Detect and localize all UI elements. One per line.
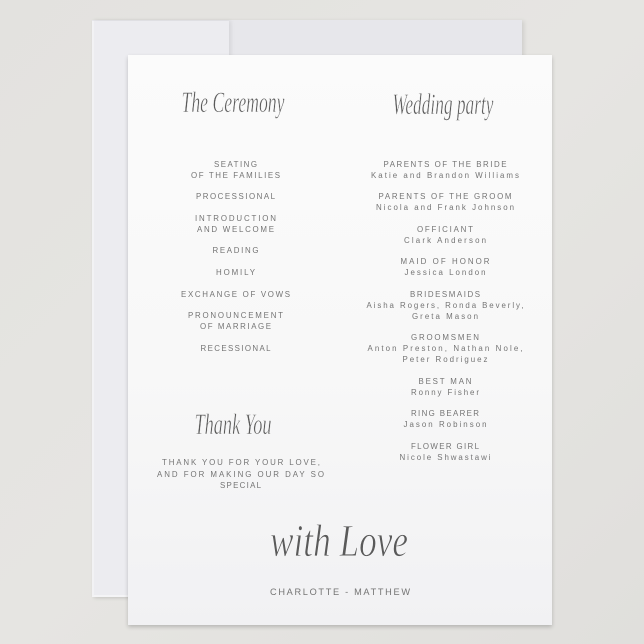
wedding party list: PARENTS OF THE GROOM <box>378 192 512 201</box>
ceremony order list: AND WELCOME <box>197 225 274 234</box>
wedding party list: Greta Mason <box>412 312 478 321</box>
wedding party list: Anton Preston, Nathan Nole, <box>368 344 522 353</box>
wedding party list: BEST MAN <box>418 377 472 386</box>
wedding party list <box>366 160 524 462</box>
wedding party list: GROOMSMEN <box>411 333 479 342</box>
wedding party list: FLOWER GIRL <box>411 442 480 451</box>
ceremony order list: HOMILY <box>216 268 256 277</box>
thank you message <box>157 458 324 490</box>
wedding party list: Nicole Shwastawi <box>400 453 491 462</box>
thank you message: AND FOR MAKING OUR DAY SO <box>157 470 324 479</box>
ceremony order list <box>181 160 290 353</box>
wedding party list: PARENTS OF THE BRIDE <box>384 160 506 169</box>
wedding party list: RING BEARER <box>411 409 479 418</box>
wedding party list: Peter Rodriguez <box>402 355 488 364</box>
wedding party list: Ronny Fisher <box>411 388 479 397</box>
wedding party list: Nicola and Frank Johnson <box>376 203 514 212</box>
wedding party list: OFFICIANT <box>417 225 473 234</box>
heading: The Ceremony: The Ceremony <box>182 86 285 119</box>
wedding party list: MAID OF HONOR <box>400 257 490 266</box>
wedding party list: Jessica London <box>404 268 486 277</box>
ceremony order list: SEATING <box>214 160 257 169</box>
ceremony order list: INTRODUCTION <box>195 214 276 223</box>
wedding party list: Katie and Brandon Williams <box>371 171 519 180</box>
thank you message: THANK YOU FOR YOUR LOVE, <box>162 458 320 467</box>
ceremony order list: OF THE FAMILIES <box>191 171 280 180</box>
heading: Wedding party: Wedding party <box>392 88 494 121</box>
couple names: CHARLOTTE - MATTHEW <box>270 587 410 597</box>
back sheet: left flap <box>92 21 229 597</box>
ceremony order list: PRONOUNCEMENT <box>188 311 283 320</box>
ceremony order list: READING <box>212 246 258 255</box>
ceremony order list: PROCESSIONAL <box>196 192 276 201</box>
back sheet: envelope <box>92 20 522 597</box>
main program card <box>128 55 552 625</box>
ceremony order list: EXCHANGE OF VOWS <box>181 290 290 299</box>
wedding party list: Clark Anderson <box>404 236 486 245</box>
wedding party list: BRIDESMAIDS <box>410 290 480 299</box>
ceremony order list: RECESSIONAL <box>200 344 271 353</box>
wedding party list: Aisha Rogers, Ronda Beverly, <box>366 301 524 310</box>
thank you message: SPECIAL <box>220 481 262 490</box>
closing script: with Love: with Love <box>270 515 408 566</box>
heading: Thank You: Thank You <box>194 408 272 441</box>
wedding party list: Jason Robinson <box>404 420 486 429</box>
ceremony order list: OF MARRIAGE <box>200 322 271 331</box>
